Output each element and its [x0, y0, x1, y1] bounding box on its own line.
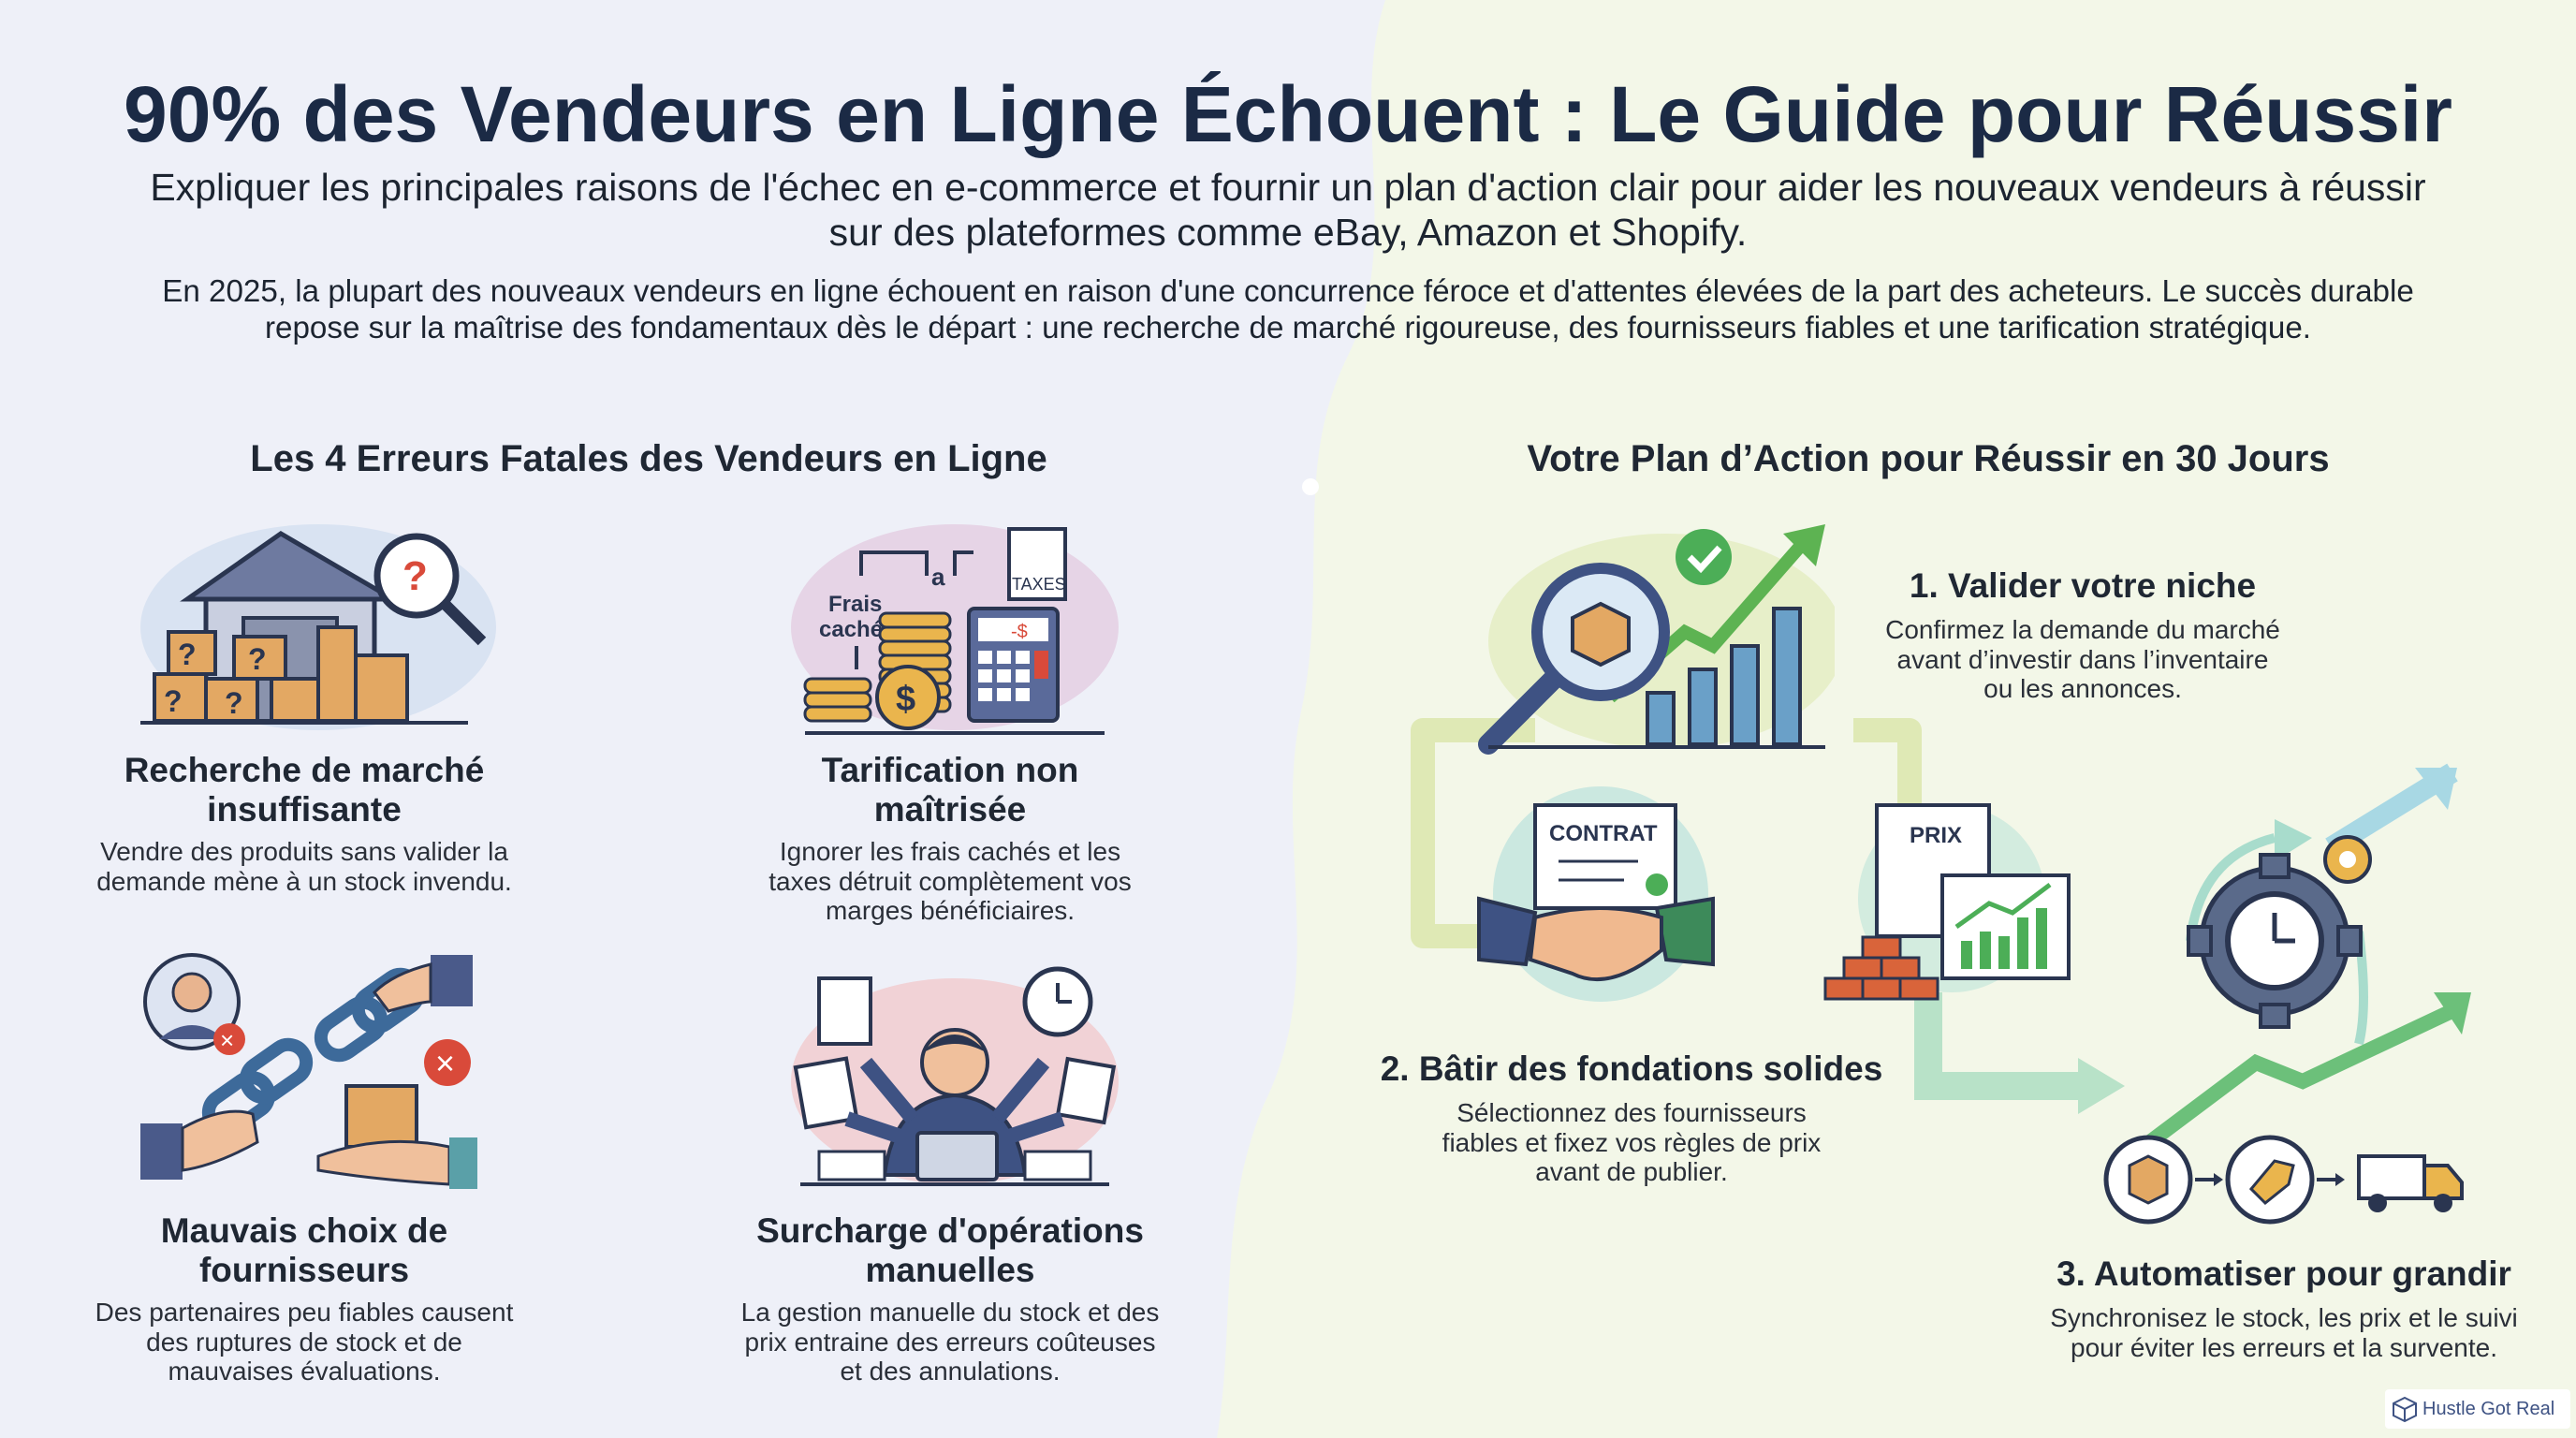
- item: operations manuelles: prix entraine des erreurs coûteuses: [745, 1328, 1155, 1356]
- subtitle: Expliquer les principales raisons de l'échec en e-commerce et fournir un plan d'action clair pour aider les nouveaux vendeurs à réussir: [150, 166, 2426, 209]
- icon: warehouse: ?: [164, 684, 183, 718]
- watermark: [2385, 1389, 2570, 1429]
- item: recherche: demande mène à un stock invendu.: [96, 867, 512, 895]
- item: tarification: maîtrisée: [874, 790, 1026, 829]
- title: 90% des Vendeurs en Ligne Échouent : Le Guide pour Réussir: [124, 70, 2452, 158]
- subtitle: sur des plateformes comme eBay, Amazon et Shopify.: [829, 211, 1747, 254]
- icon: warehouse: ?: [178, 638, 197, 671]
- icon: coins and calculator: a: [931, 563, 945, 591]
- intro paragraph: En 2025, la plupart des nouveaux vendeurs en ligne échouent en raison d'une concurrence féroce et d'attentes élevées de la part des acheteurs. Le succès durable: [162, 274, 2414, 309]
- item: fournisseurs: Mauvais choix de: [161, 1211, 447, 1250]
- item: tarification: [768, 751, 1132, 925]
- icon: coins and calculator: cachés: [819, 617, 895, 642]
- heading: plan: Votre Plan d’Action pour Réussir en 30 Jours: [1527, 438, 2330, 479]
- step 1 text: 1. Valider votre niche: [1910, 566, 2256, 605]
- item: recherche: Vendre des produits sans valider la: [100, 837, 508, 866]
- step 2 text: avant de publier.: [1535, 1157, 1728, 1186]
- icon: automation gear and pipeline: [2104, 764, 2471, 1225]
- step 1 text: ou les annonces.: [1983, 674, 2182, 703]
- intro paragraph: repose sur la maîtrise des fondamentaux dès le départ : une recherche de marché rigoureuse, des fournisseurs fiables et une tarification stratégique.: [265, 311, 2311, 345]
- icon: handshake contract: [1477, 786, 1715, 1002]
- icon: coins and calculator: [791, 524, 1119, 735]
- item: fournisseurs: Des partenaires peu fiables causent: [95, 1298, 513, 1327]
- step 3 text: Synchronisez le stock, les prix et le suivi: [2050, 1303, 2518, 1332]
- item: operations manuelles: manuelles: [865, 1251, 1034, 1289]
- item: operations manuelles: et des annulations.: [840, 1357, 1061, 1386]
- step 3 text: pour éviter les erreurs et la survente.: [2071, 1333, 2497, 1361]
- step 3 text: [2050, 1255, 2518, 1362]
- step 2 text: 2. Bâtir des fondations solides: [1381, 1049, 1882, 1088]
- icon: price document bricks: PRIX: [1910, 823, 1962, 848]
- icon: broken chain: ×: [435, 1044, 455, 1082]
- step 1 text: Confirmez la demande du marché: [1885, 615, 2280, 644]
- watermark: Hustle Got Real: [2422, 1399, 2554, 1419]
- item: fournisseurs: fournisseurs: [199, 1251, 409, 1289]
- icon: broken chain: [140, 953, 477, 1189]
- icon: coins and calculator: -$: [1011, 622, 1028, 642]
- step 2 text: fiables et fixez vos règles de prix: [1442, 1127, 1821, 1157]
- icon: handshake contract: CONTRAT: [1549, 821, 1658, 846]
- item: operations manuelles: Surcharge d'opérations: [756, 1211, 1144, 1250]
- icon: broken chain: ×: [220, 1026, 234, 1054]
- heading: erreurs: Les 4 Erreurs Fatales des Vendeurs en Ligne: [250, 438, 1047, 479]
- step 2 text: [1381, 1049, 1882, 1186]
- subtitle: [150, 166, 2426, 254]
- item: tarification: Tarification non: [822, 751, 1078, 789]
- icon: step1 magnifier chart: [1478, 524, 1835, 755]
- item: fournisseurs: [95, 1211, 513, 1386]
- item: tarification: marges bénéficiaires.: [826, 896, 1075, 925]
- icon: warehouse: ?: [402, 553, 428, 599]
- item: operations manuelles: La gestion manuelle du stock et des: [741, 1298, 1159, 1327]
- icon: coins and calculator: Frais: [828, 592, 882, 617]
- item: tarification: taxes détruit complètement vos: [768, 867, 1132, 895]
- item: fournisseurs: mauvaises évaluations.: [168, 1357, 441, 1386]
- icon: coins and calculator: TAXES: [1012, 575, 1066, 594]
- icon: warehouse: [140, 524, 496, 730]
- item: fournisseurs: des ruptures de stock et de: [146, 1328, 462, 1356]
- step 1 text: avant d’investir dans l’inventaire: [1897, 644, 2268, 674]
- icon: coins and calculator: $: [896, 680, 915, 719]
- item: tarification: Ignorer les frais cachés et les: [780, 837, 1120, 866]
- item: operations manuelles: [741, 1211, 1159, 1386]
- step 1 text: [1885, 566, 2280, 703]
- step 3 text: 3. Automatiser pour grandir: [2056, 1255, 2511, 1293]
- item: recherche: [96, 751, 512, 895]
- intro paragraph: [162, 274, 2414, 345]
- icon: warehouse: ?: [225, 686, 243, 720]
- connector paths: [1411, 718, 2125, 1114]
- step 2 text: Sélectionnez des fournisseurs: [1456, 1098, 1807, 1127]
- icon: warehouse: ?: [248, 642, 267, 676]
- item: recherche: Recherche de marché: [124, 751, 484, 789]
- icon: overwhelmed worker: [791, 966, 1119, 1186]
- icon: price document bricks: [1823, 803, 2071, 1000]
- item: recherche: insuffisante: [207, 790, 402, 829]
